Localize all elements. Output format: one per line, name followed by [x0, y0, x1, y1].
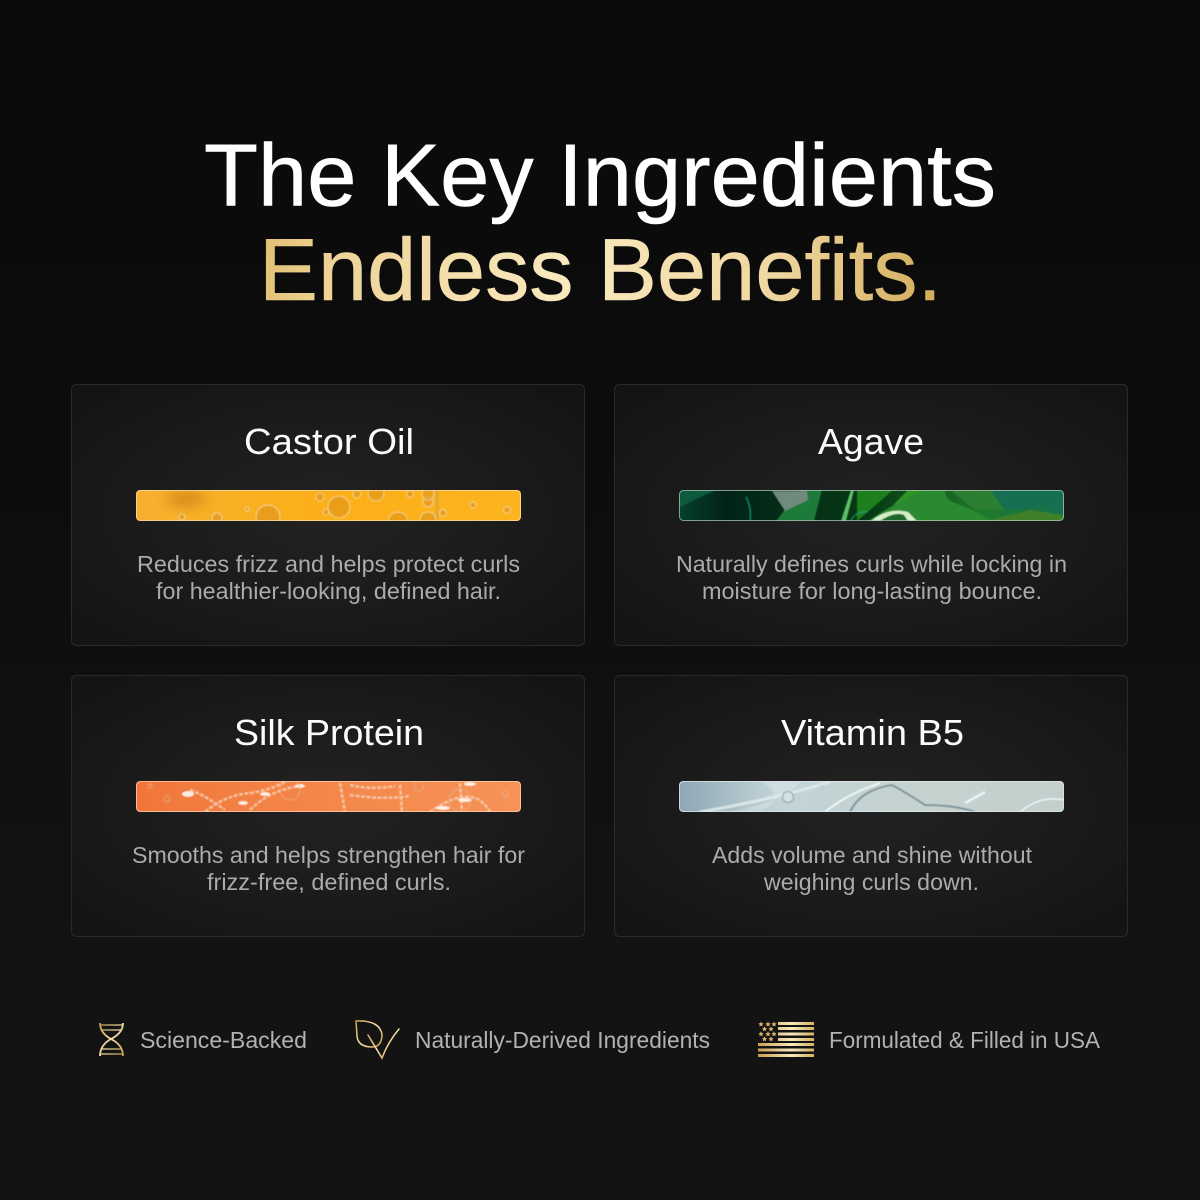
title: Endless Benefits.: [259, 220, 942, 319]
panel: silk protein: [72, 676, 584, 936]
description: vitamin b5: [712, 842, 1033, 895]
panel: vitamin b5: [614, 676, 1128, 936]
panel: castor oil: [72, 384, 584, 646]
badge: formulated in usa: [758, 1022, 1101, 1057]
description: silk protein: Smooths and helps strengthen hair for: [132, 842, 525, 868]
image strip: water splash: [679, 781, 1064, 812]
badge: science-backed: [100, 1023, 307, 1056]
description: vitamin b5: weighing curls down.: [763, 869, 979, 895]
label: formulated in usa: Formulated & Filled in USA: [829, 1027, 1101, 1053]
description: vitamin b5: Adds volume and shine without: [712, 842, 1033, 868]
heading: castor oil: Castor Oil: [244, 421, 414, 462]
badge: naturally-derived: [356, 1021, 710, 1058]
description: castor oil: for healthier-looking, defined hair.: [156, 578, 501, 604]
image strip: agave leaves: [679, 490, 1064, 521]
title: The Key Ingredients: [204, 126, 996, 224]
image strip: oil bubbles: [136, 490, 521, 521]
panel: agave: [614, 384, 1128, 646]
heading: silk protein: Silk Protein: [234, 712, 424, 753]
title: [204, 126, 996, 319]
heading: agave: Agave: [818, 421, 924, 462]
description: agave: [676, 551, 1067, 604]
image strip: silk bubbles: [136, 780, 521, 812]
description: castor oil: [137, 551, 520, 604]
heading: vitamin b5: Vitamin B5: [781, 712, 964, 753]
icon: leaf check: [356, 1021, 399, 1058]
icon: dna: [100, 1023, 123, 1056]
icon: gold flag: [758, 1022, 814, 1057]
description: silk protein: [132, 842, 525, 895]
description: agave: Naturally defines curls while locking in: [676, 551, 1067, 577]
description: castor oil: Reduces frizz and helps protect curls: [137, 551, 520, 577]
description: agave: moisture for long-lasting bounce.: [702, 578, 1042, 604]
description: silk protein: frizz-free, defined curls.: [207, 869, 451, 895]
label: science-backed: Science-Backed: [140, 1027, 307, 1053]
label: naturally-derived: Naturally-Derived Ingredients: [415, 1027, 710, 1053]
